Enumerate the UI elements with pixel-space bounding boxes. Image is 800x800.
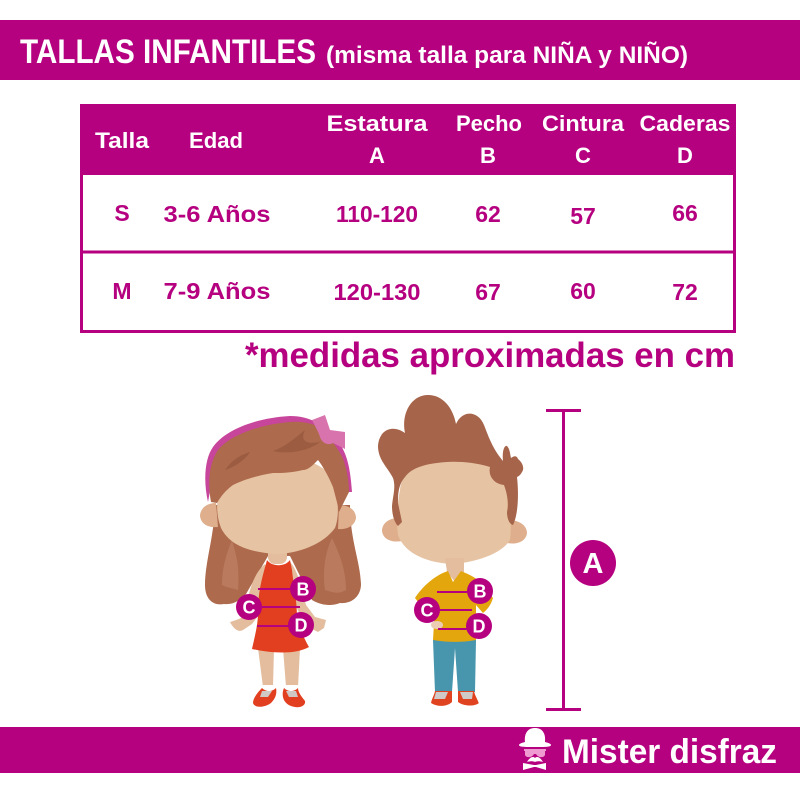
girl ears xyxy=(200,503,356,529)
girl headband xyxy=(205,416,352,502)
title banner: (misma talla para NIÑA y NIÑO) xyxy=(326,41,688,69)
table header: B xyxy=(480,143,496,168)
table header: Cintura xyxy=(542,111,625,136)
boy badge C xyxy=(414,597,440,623)
table header: C xyxy=(575,143,591,168)
table row M xyxy=(112,278,698,305)
boy face xyxy=(397,452,511,564)
girl hair back xyxy=(205,505,361,605)
table row S xyxy=(114,200,698,229)
table row S: S xyxy=(114,200,130,226)
table row S: 57 xyxy=(570,203,596,229)
girl figure xyxy=(200,415,361,707)
boy badge C: C xyxy=(420,600,434,620)
girl measurement lines xyxy=(257,589,300,626)
girl badge C xyxy=(236,594,262,620)
boy shoes xyxy=(431,691,479,708)
girl shoes xyxy=(253,688,305,707)
girl badge D xyxy=(288,612,314,638)
table row M: M xyxy=(112,278,132,304)
boy figure xyxy=(378,395,527,708)
table header xyxy=(95,111,730,168)
note: approximate measures: *medidas aproximadas en cm xyxy=(245,336,735,375)
table header: Talla xyxy=(95,128,150,153)
girl dress xyxy=(252,560,309,652)
table header: A xyxy=(369,143,385,168)
girl legs xyxy=(258,648,300,687)
girl face xyxy=(217,458,338,554)
girl bow xyxy=(312,415,345,449)
girl badge B: B xyxy=(296,580,310,600)
girl socks xyxy=(262,685,298,691)
title banner: TALLAS INFANTILES xyxy=(20,33,316,71)
boy ears xyxy=(382,518,527,544)
footer banner: Mister disfraz xyxy=(562,733,777,771)
table header: Estatura xyxy=(326,111,428,136)
boy jeans xyxy=(433,640,476,692)
height badge A: A xyxy=(583,548,604,580)
girl badge B xyxy=(290,576,316,602)
table row S: 62 xyxy=(475,201,501,227)
girl badge D: D xyxy=(294,616,308,636)
girl neck xyxy=(268,545,287,564)
table row S: 3-6 Años xyxy=(164,201,270,227)
table row M: 7-9 Años xyxy=(164,278,270,304)
table row S: 66 xyxy=(672,200,698,226)
height badge A xyxy=(570,540,616,586)
girl hair highlights xyxy=(222,538,346,593)
table row M: 72 xyxy=(672,279,698,305)
table header: Edad xyxy=(189,128,243,153)
boy neck xyxy=(445,558,464,582)
icon: mister disfraz logo xyxy=(519,728,551,770)
boy sweater xyxy=(415,571,493,642)
boy badge D xyxy=(466,613,492,639)
footer banner xyxy=(0,727,800,773)
table row M: 120-130 xyxy=(334,279,420,305)
girl arms and hands xyxy=(230,562,326,632)
table header: D xyxy=(677,143,693,168)
boy hair xyxy=(378,395,523,526)
boy hand xyxy=(431,621,443,629)
title banner xyxy=(0,20,800,80)
table row M: 67 xyxy=(475,279,501,305)
height ruler xyxy=(546,410,581,710)
table row S: 110-120 xyxy=(336,201,418,227)
boy badge D: D xyxy=(472,616,486,636)
boy badge B xyxy=(467,578,493,604)
girl fringe strands xyxy=(225,430,320,470)
size table xyxy=(80,104,736,332)
girl badge C: C xyxy=(242,598,256,618)
table row M: 60 xyxy=(570,278,596,304)
table header: Caderas xyxy=(640,111,730,136)
boy badge B: B xyxy=(474,582,486,602)
table header: Pecho xyxy=(456,111,522,136)
boy measurement lines xyxy=(437,592,472,629)
girl fringe xyxy=(209,422,349,512)
